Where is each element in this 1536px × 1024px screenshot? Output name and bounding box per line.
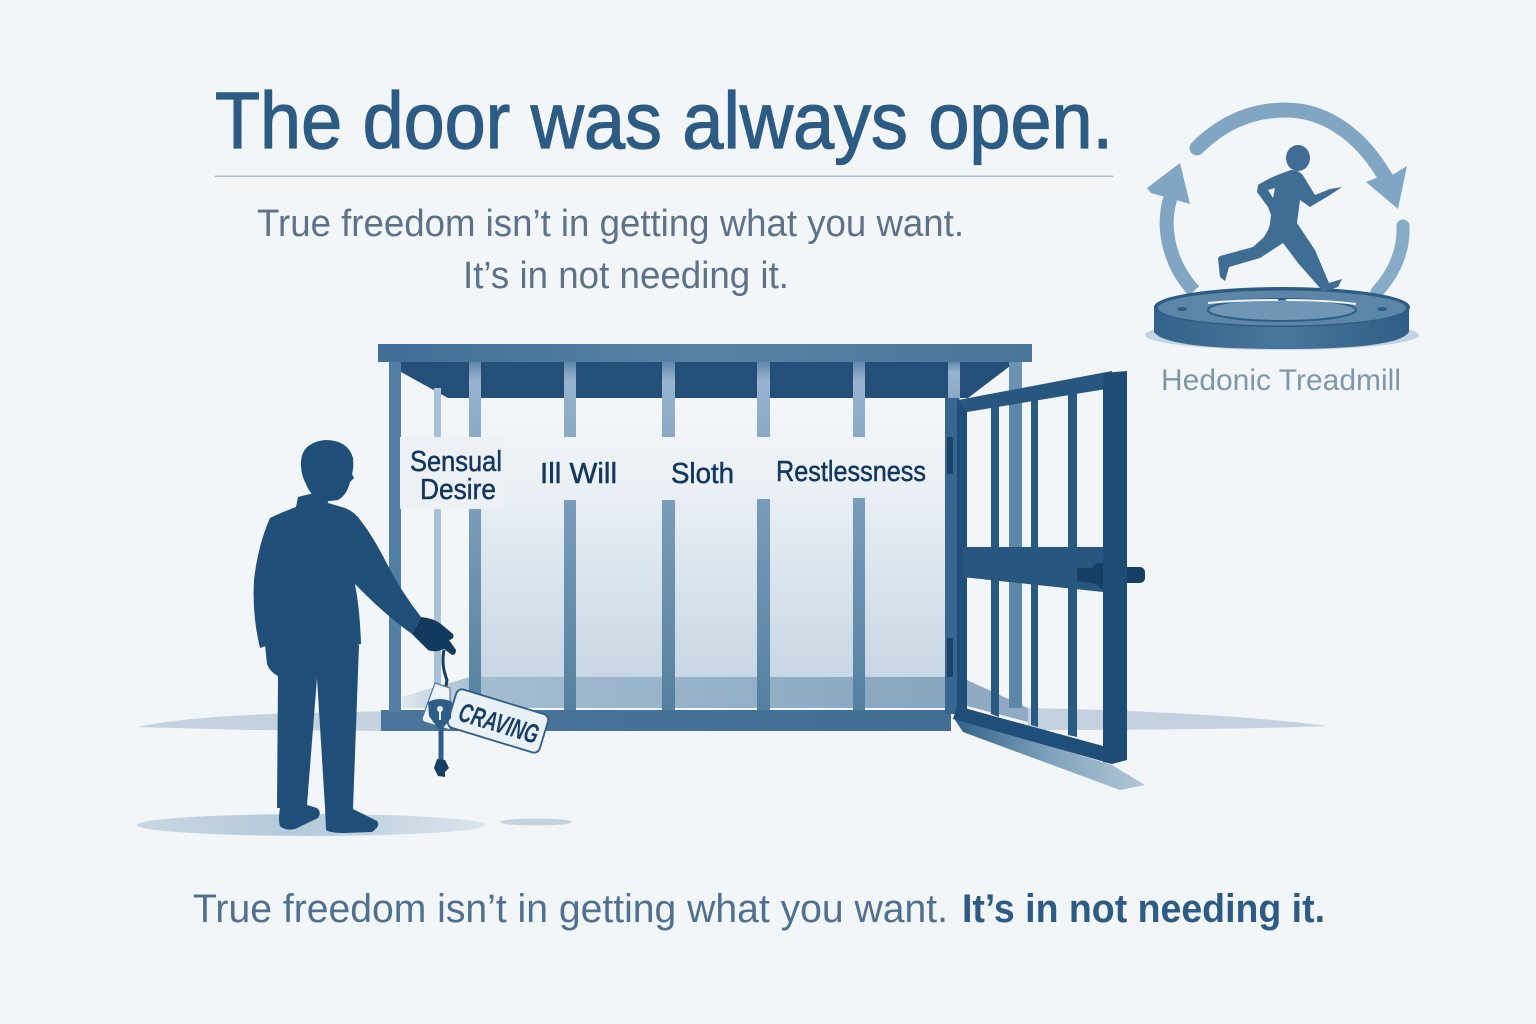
far cage post behind door xyxy=(1009,392,1022,708)
cage upper bars xyxy=(434,362,960,437)
far cage floor behind door xyxy=(967,680,1028,722)
subtitle: It’s in not needing it. xyxy=(463,255,789,297)
bottom tagline: It’s in not needing it. xyxy=(962,887,1325,931)
cage labels xyxy=(400,437,926,509)
label: sensual desire: Sensual xyxy=(410,446,502,478)
head xyxy=(301,440,354,502)
icon: hedonic treadmill xyxy=(1145,110,1419,350)
door hinge post xyxy=(945,398,959,714)
label: sensual desire: Desire xyxy=(420,474,496,506)
cage left post xyxy=(389,362,401,712)
bottom tagline xyxy=(193,887,1325,931)
open door xyxy=(945,371,1145,790)
cage ceiling xyxy=(401,362,1010,398)
cage lower bars xyxy=(434,498,865,710)
label: sensual desire xyxy=(400,437,504,509)
label: ill will: Ill Will xyxy=(540,458,617,490)
door top rail xyxy=(958,371,1112,412)
door outer stile xyxy=(1103,371,1127,764)
ground shadow xyxy=(137,708,1328,731)
person ground shadow xyxy=(137,814,485,836)
hand xyxy=(412,617,456,655)
door shadow xyxy=(953,717,1145,790)
cage base xyxy=(381,710,951,731)
cycle arrows xyxy=(1147,110,1407,292)
treadmill label: Hedonic Treadmill xyxy=(1161,364,1401,397)
treadmill base shadow xyxy=(1145,320,1419,350)
door hinges xyxy=(947,437,953,474)
cage floor xyxy=(402,677,950,708)
runner arm gap xyxy=(1268,188,1275,198)
jacket xyxy=(254,490,421,653)
title divider xyxy=(215,176,1113,177)
subtitle: True freedom isn’t in getting what you want. xyxy=(257,203,964,245)
cage roof xyxy=(378,344,1032,362)
cage xyxy=(378,344,1032,731)
cage back wall xyxy=(475,398,949,683)
back tag xyxy=(422,683,450,730)
subtitle xyxy=(257,203,964,297)
door bottom rail xyxy=(953,706,1112,764)
bottom tagline: True freedom isn’t in getting what you want. xyxy=(193,887,948,931)
label: restlessness: Restlessness xyxy=(776,456,926,488)
key cord xyxy=(443,650,447,692)
title: The door was always open. xyxy=(215,76,1113,165)
key xyxy=(428,699,452,777)
door handle xyxy=(1077,563,1103,590)
legs xyxy=(265,645,378,833)
running figure xyxy=(1218,145,1342,292)
small floor shadow xyxy=(500,818,572,826)
tag body xyxy=(446,688,550,754)
door bars xyxy=(991,404,999,717)
door middle rail xyxy=(962,547,1103,592)
treadmill platform xyxy=(1154,307,1409,349)
craving key tag xyxy=(422,650,550,777)
person silhouette xyxy=(254,440,456,833)
label: sloth: Sloth xyxy=(671,458,734,490)
tag text: CRAVING xyxy=(455,697,542,750)
